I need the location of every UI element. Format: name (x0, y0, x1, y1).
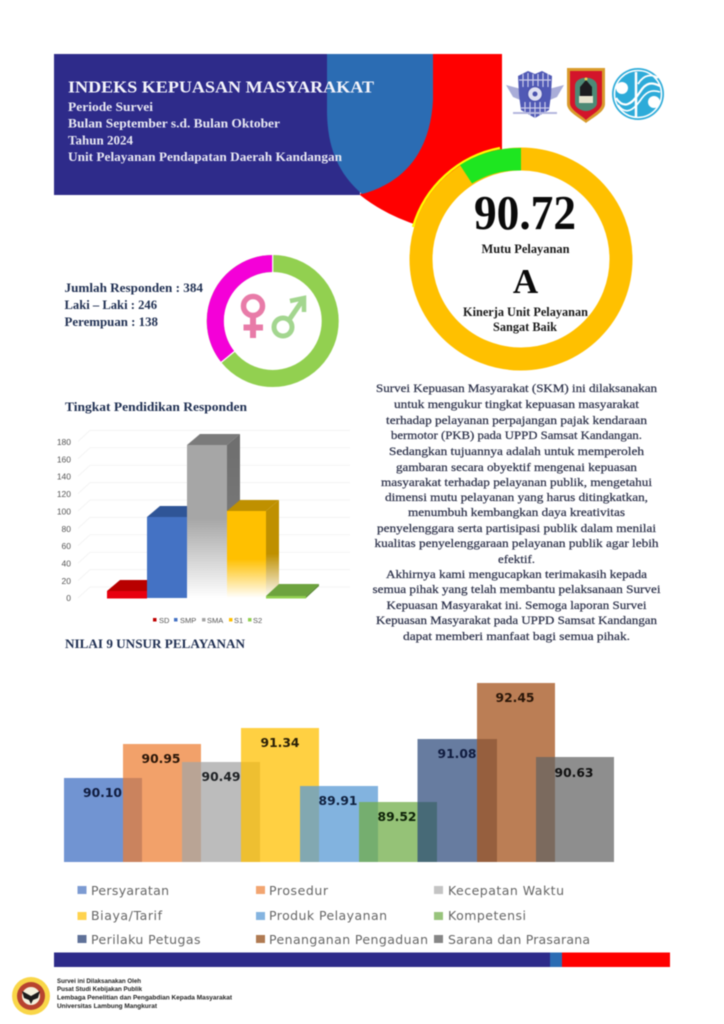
chart axis labels: 100 (57, 506, 71, 516)
footer credits: Pusat Studi Kebijakan Publik (57, 987, 143, 993)
paragraph: untuk mengukur tingkat kepuasan masyarakat (394, 397, 640, 411)
respondent counts: Perempuan : 138 (64, 315, 158, 329)
service values legend: Biaya/Tarif (91, 908, 163, 923)
header banner (54, 54, 502, 226)
footer credits (57, 979, 232, 1010)
bar: SMA (187, 434, 240, 598)
paragraph: terhadap pelayanan perpajangan pajak kendaraan (386, 413, 647, 427)
header details (68, 100, 342, 164)
respondent counts: Jumlah Responden : 384 (64, 281, 204, 295)
gender donut (215, 254, 330, 378)
score gauge (413, 148, 621, 359)
gauge yellow edge (413, 148, 500, 227)
service values legend: Perilaku Petugas (91, 932, 200, 947)
chart legend: SMP (180, 616, 196, 625)
service values legend: Penanganan Pengaduan (269, 932, 428, 947)
chart axis labels: 20 (62, 576, 71, 586)
bar values: 92.45 (496, 691, 534, 705)
heading: education: Tingkat Pendidikan Responden (65, 399, 248, 414)
icon: police emblem logo (506, 71, 564, 118)
service values bar chart (64, 683, 614, 862)
gauge green segment (460, 148, 521, 184)
service values legend: Kompetensi (448, 908, 526, 923)
icon: male symbol (274, 298, 304, 336)
bar values: 89.91 (319, 794, 357, 808)
bar values: 89.52 (378, 810, 416, 824)
chart legend: S2 (253, 616, 262, 625)
chart legend: SMA (207, 616, 223, 625)
paragraph: semua pihak yang telah membantu pelaksanaan Survei (372, 582, 661, 596)
chart legend (153, 616, 262, 625)
service values legend: Sarana dan Prasarana (448, 932, 590, 947)
service values legend: Persyaratan (91, 883, 169, 898)
header details: Periode Survei (68, 100, 154, 114)
chart axis labels: 60 (62, 541, 71, 551)
paragraph: dapat memberi manfaat bagi semua pihak. (403, 629, 630, 643)
chart legend: S1 (234, 616, 243, 625)
bar values (83, 691, 593, 824)
bar values: 90.49 (202, 770, 240, 784)
paragraph: gambaran secara obyektif mengenai kepuasan (396, 460, 637, 474)
paragraph: Kepuasan Masyarakat pada UPPD Samsat Kandangan (376, 613, 657, 627)
header details: Tahun 2024 (68, 134, 134, 148)
service values legend: Produk Pelayanan (269, 908, 387, 923)
bar values: 91.08 (438, 747, 476, 761)
chart axis labels: 0 (66, 593, 71, 603)
paragraph: Survei Kepuasan Masyarakat (SKM) ini dilaksanakan (376, 381, 657, 395)
score value: 90.72 (474, 185, 576, 240)
paragraph (372, 381, 661, 643)
footer credits: Universitas Lambung Mangkurat (57, 1004, 157, 1010)
performance caption: Kinerja Unit Pelayanan (463, 305, 588, 319)
score caption: Mutu Pelayanan (482, 242, 570, 256)
bar values: 90.95 (142, 752, 180, 766)
paragraph: efektif. (498, 552, 535, 566)
icon: teal circular logo (612, 68, 664, 120)
performance caption: Sangat Baik (493, 320, 557, 334)
respondent counts: Laki – Laki : 246 (64, 298, 157, 312)
paragraph: penyelenggara serta partisipasi publik dalam menilai (377, 521, 657, 535)
bar values: 90.10 (83, 786, 122, 800)
icon: female symbol (244, 296, 263, 338)
bar: SMP (147, 506, 200, 598)
chart axis labels: 180 (57, 437, 71, 447)
paragraph: Akhirnya kami mengucapkan terimakasih kepada (386, 567, 648, 581)
bar values: 90.63 (555, 766, 593, 780)
paragraph: kualitas penyelenggaraan pelayanan publik agar lebih (374, 536, 658, 550)
header details: Unit Pelayanan Pendapatan Daerah Kandangan (68, 150, 342, 164)
paragraph: dimensi mutu pelayanan yang harus ditingkatkan, (385, 490, 648, 504)
heading: service values: NILAI 9 UNSUR PELAYANAN (65, 636, 246, 651)
paragraph: Sedangkan tujuannya adalah untuk memperoleh (389, 444, 644, 458)
header title: INDEKS KEPUASAN MASYARAKAT (68, 78, 375, 96)
footer bar (54, 952, 670, 967)
education 3D bar chart (57, 430, 350, 625)
chart axis labels: 120 (57, 489, 71, 499)
service values legend: Prosedur (269, 883, 329, 898)
paragraph: masyarakat terhadap pelayanan publik, mengetahui (381, 475, 653, 489)
header details: Bulan September s.d. Bulan Oktober (68, 116, 280, 130)
bar: S2 (266, 584, 319, 598)
bar: S1 (227, 500, 279, 598)
paragraph: bermotor (PKB) pada UPPD Samsat Kandangan. (391, 428, 642, 442)
paragraph: menumbuh kembangkan daya kreativitas (408, 505, 625, 519)
footer credits: Survei ini Dilaksanakan Oleh (57, 979, 141, 985)
performance caption (463, 305, 588, 334)
chart legend: SD (159, 616, 170, 625)
bar values: 91.34 (261, 736, 299, 750)
icon: province shield logo (567, 68, 605, 123)
service values legend: Kecepatan Waktu (448, 883, 564, 898)
bar: SD (107, 580, 160, 598)
respondent counts (64, 281, 204, 329)
footer credits: Lembaga Penelitian dan Pengabdian Kepada Masyarakat (57, 996, 232, 1002)
chart axis labels: 140 (57, 472, 71, 482)
icon: university seal (12, 977, 50, 1015)
chart axis labels (57, 437, 71, 603)
paragraph: Kepuasan Masyarakat ini. Semoga laporan Survei (386, 598, 647, 612)
grade letter: A (513, 262, 539, 301)
service values legend (78, 883, 590, 947)
chart axis labels: 160 (57, 454, 71, 464)
chart axis labels: 80 (62, 524, 71, 534)
chart axis labels: 40 (62, 558, 71, 568)
